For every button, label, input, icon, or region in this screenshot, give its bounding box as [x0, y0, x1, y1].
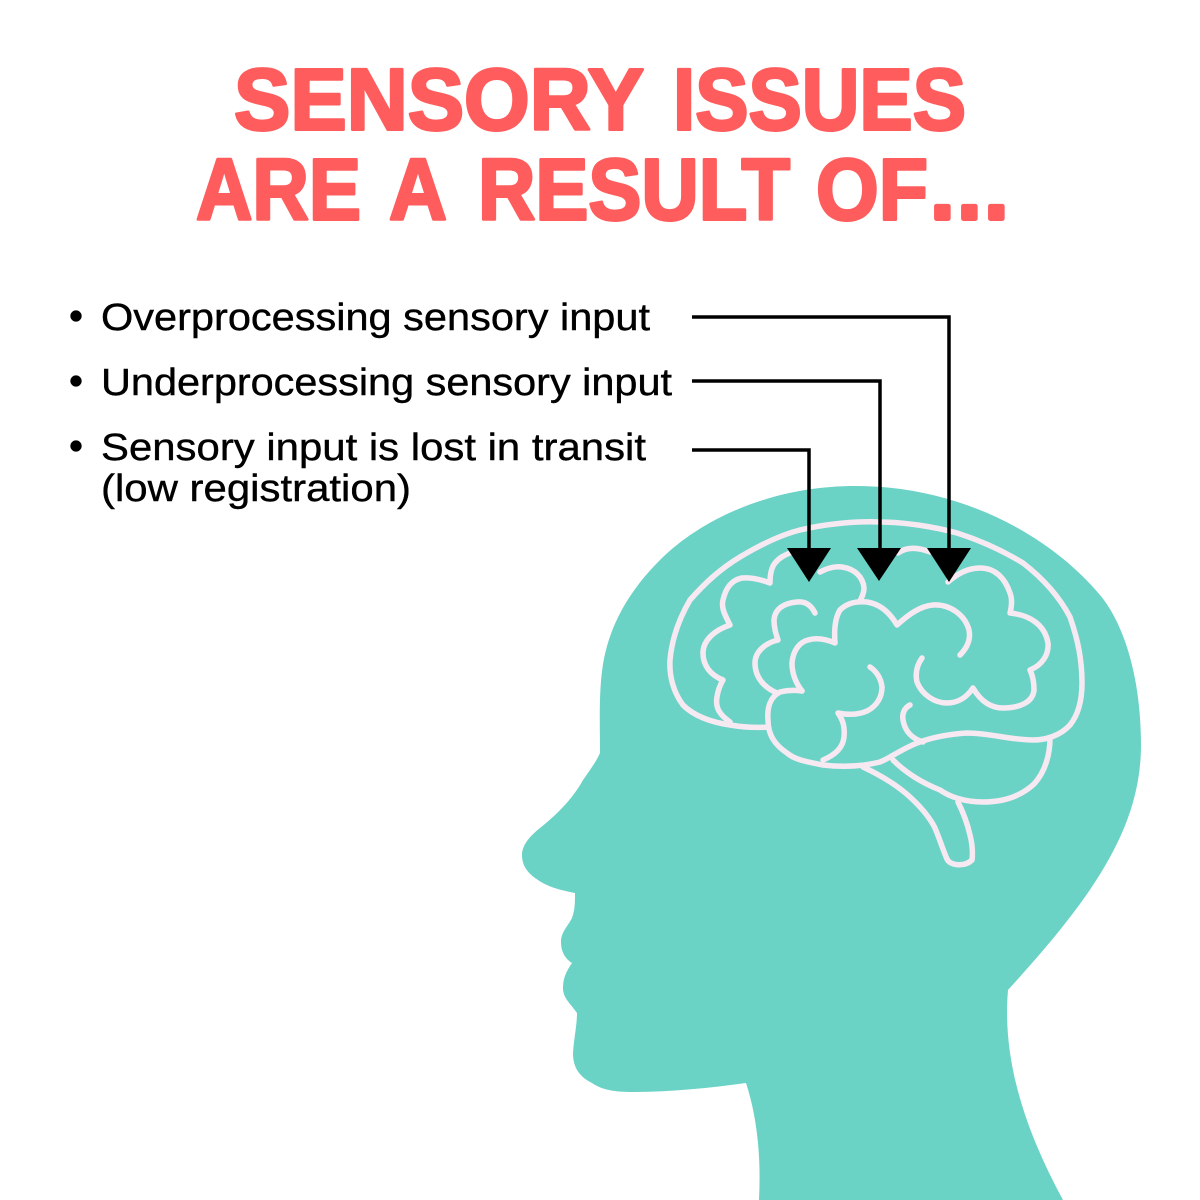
bullet 3	[70, 427, 646, 510]
head silhouette	[522, 486, 1141, 1200]
bullet 2: Underprocessing sensory input	[101, 362, 672, 404]
bullet 3: Sensory input is lost in transit	[101, 427, 646, 469]
bullet list	[70, 297, 672, 510]
inner frontal fold	[755, 602, 815, 693]
cerebellum	[893, 738, 1050, 802]
frontal lobe fold	[703, 553, 790, 722]
bullet 3: (low registration)	[101, 468, 411, 510]
brain outline	[670, 522, 1082, 865]
title: ISSUES	[673, 52, 966, 148]
bullet 1: Overprocessing sensory input	[101, 297, 650, 339]
arrow: overprocessing	[692, 317, 971, 582]
title: OF	[816, 142, 928, 238]
small temporal fold	[903, 705, 923, 742]
title: A	[389, 142, 447, 238]
title	[196, 52, 1008, 238]
title: SENSORY	[234, 52, 644, 148]
title: ARE	[196, 142, 361, 238]
arrow: lost in transit	[692, 450, 831, 582]
lower lobe fold	[823, 667, 882, 760]
right lobe fold	[916, 568, 1048, 708]
top fold behind first arrow	[820, 567, 864, 601]
brain stem	[863, 767, 972, 865]
arrow: underprocessing	[692, 381, 901, 581]
title: RESULT	[478, 142, 790, 238]
title: ...	[931, 146, 1008, 236]
top fold between arrows	[898, 548, 930, 553]
central fold	[792, 602, 970, 691]
outer brain contour	[670, 522, 1082, 766]
